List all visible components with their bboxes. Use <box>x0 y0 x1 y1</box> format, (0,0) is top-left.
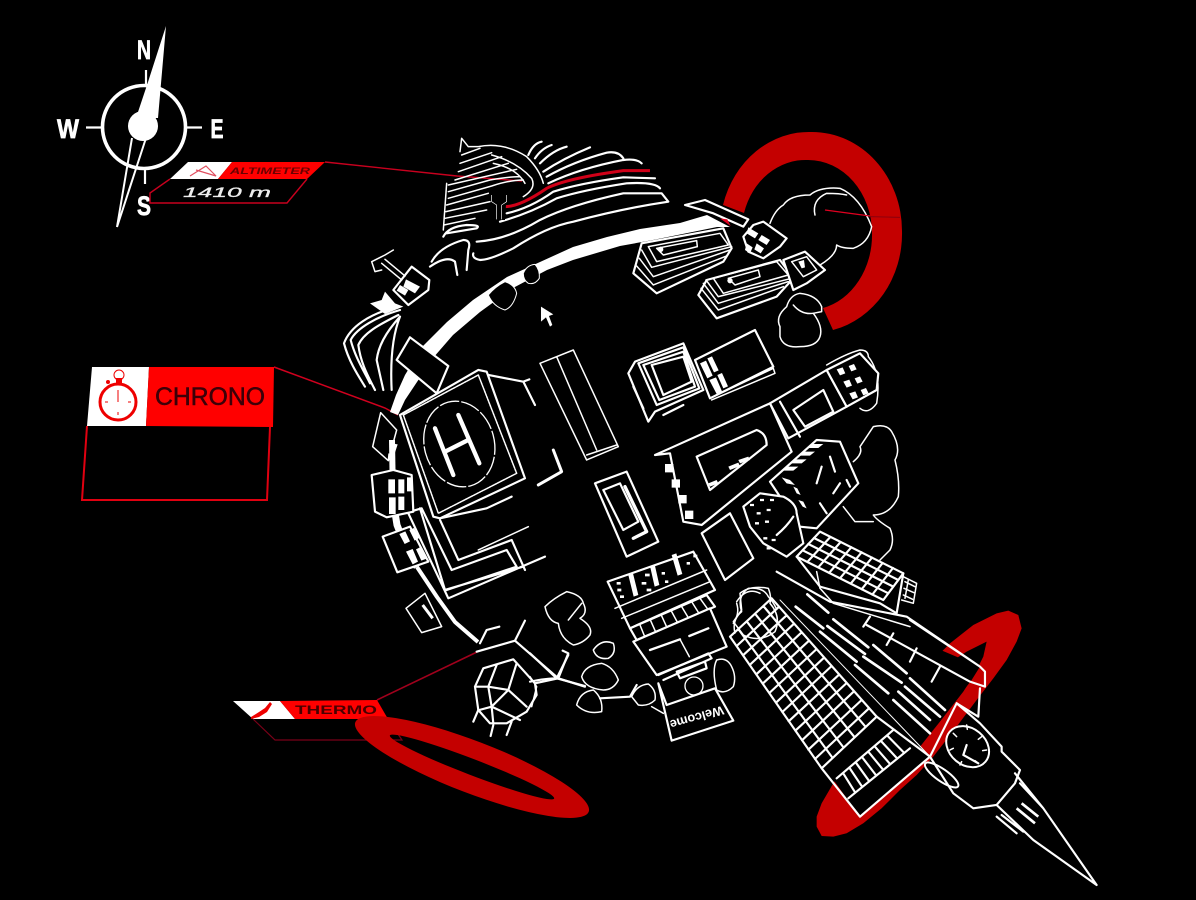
red ring: top right arc <box>723 132 902 330</box>
empty plot <box>702 513 753 580</box>
panel: altimeter: ALTIMETER <box>228 166 311 176</box>
upper strip <box>777 572 985 757</box>
panel: altimeter: 1410 m <box>183 184 272 200</box>
panel: chrono <box>82 367 398 500</box>
lower hall <box>633 608 727 695</box>
panel: altimeter <box>150 162 522 203</box>
tree <box>778 293 822 347</box>
left edge cubes <box>372 470 428 572</box>
trees <box>530 591 760 713</box>
left slope <box>370 292 403 314</box>
window cube <box>743 222 787 258</box>
compass: E <box>210 114 224 144</box>
slab <box>685 200 748 227</box>
panel: chrono: CHRONO <box>155 383 265 411</box>
pool building <box>655 403 792 525</box>
center slot block <box>595 472 658 557</box>
lower buildings and welcome sign <box>530 552 760 741</box>
compass <box>57 26 224 227</box>
roadside trees <box>488 264 539 310</box>
slab <box>397 337 448 393</box>
helipad and central blocks <box>373 350 658 633</box>
dome and lower road <box>473 621 585 736</box>
road: thick white ring road <box>390 215 730 642</box>
panel: thermo: THERMO <box>295 703 377 717</box>
skyscraper and clock tower <box>730 572 1097 885</box>
tree by tower <box>733 587 777 638</box>
top right buildings <box>633 188 900 347</box>
right side buildings <box>628 330 917 640</box>
window tower <box>770 353 878 438</box>
clock tower <box>922 703 1097 885</box>
small outbuilding <box>406 593 442 633</box>
grid face <box>730 598 930 817</box>
welcome sign <box>658 683 733 741</box>
person silhouette <box>492 191 507 220</box>
black mass <box>730 593 980 817</box>
trees <box>734 350 899 640</box>
welcome sign: Welcome <box>668 703 725 732</box>
concentric box <box>628 343 703 422</box>
small building <box>783 252 825 290</box>
ladder strip <box>837 730 910 798</box>
helipad <box>400 370 525 518</box>
box by helipad corner <box>373 413 398 461</box>
grid block <box>797 532 917 627</box>
plain box with windows <box>695 330 775 400</box>
red ring: lower right halo <box>817 611 1022 837</box>
arched block <box>743 493 803 557</box>
mountain contours <box>344 138 668 393</box>
striped block <box>770 440 858 528</box>
long stripes <box>796 594 945 733</box>
cable car <box>372 250 429 305</box>
compass: S <box>137 191 151 221</box>
tree cloud <box>770 188 872 265</box>
dotted roof block <box>608 552 715 628</box>
red ring: lower left halo <box>346 698 598 836</box>
balcony row <box>630 595 715 640</box>
cursor <box>541 307 553 327</box>
compass: W <box>57 114 79 144</box>
L building <box>408 508 545 598</box>
building A <box>633 228 732 293</box>
clock <box>938 718 997 776</box>
blocks <box>488 375 535 405</box>
compass: N <box>137 35 151 65</box>
icon: stopwatch <box>100 370 136 420</box>
building B <box>698 260 793 318</box>
panel: thermo <box>233 652 477 740</box>
